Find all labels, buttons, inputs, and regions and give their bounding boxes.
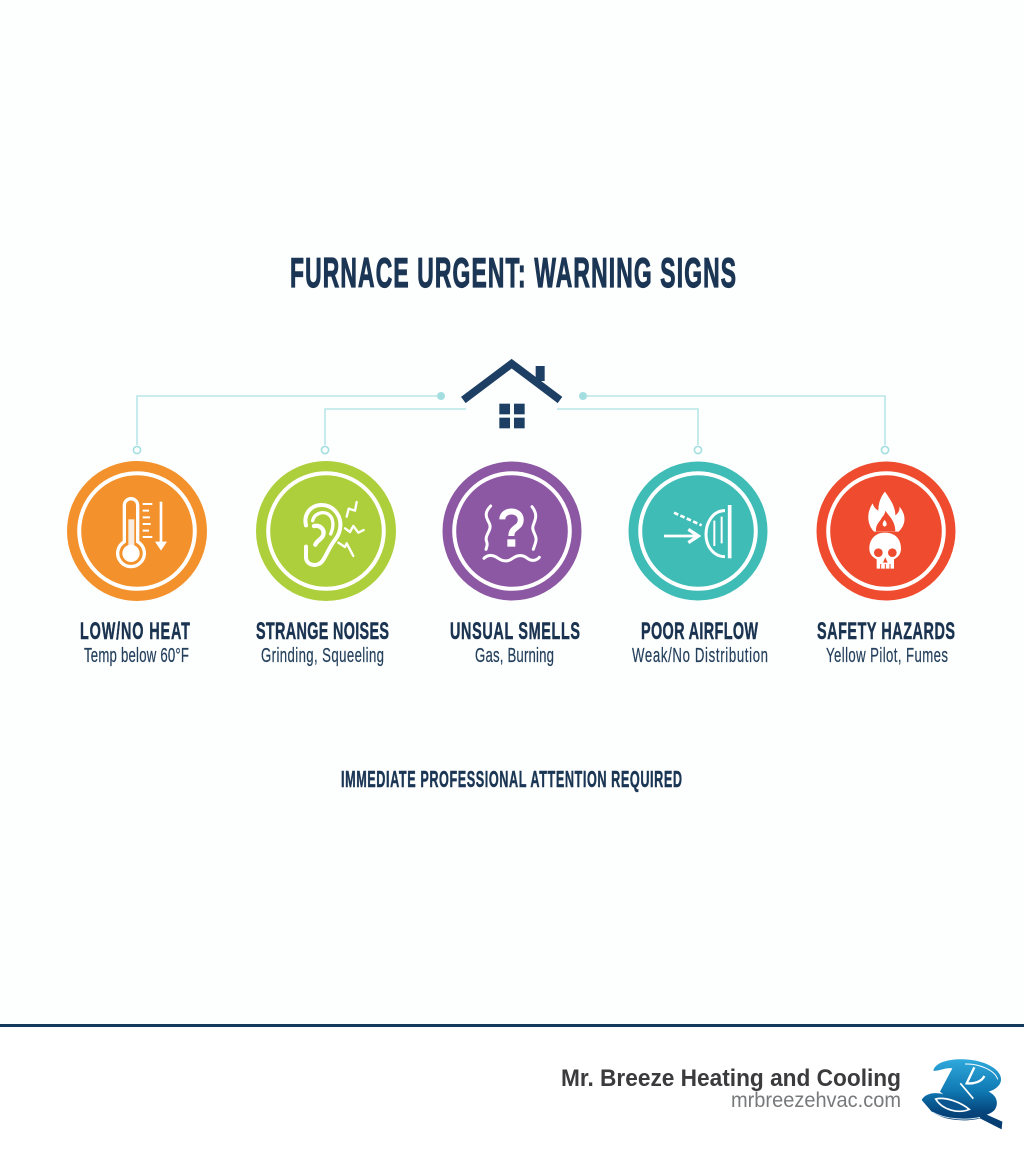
- panel: strange noises: [256, 461, 396, 667]
- callout: IMMEDIATE PROFESSIONAL ATTENTION REQUIRED: [341, 766, 682, 792]
- teal badge: [628, 462, 768, 600]
- sublabel: Yellow Pilot, Fumes: [826, 644, 948, 667]
- footer rule: [0, 1024, 1024, 1027]
- sublabel: Grinding, Squeeling: [261, 644, 384, 667]
- panel: unusual smells: [442, 462, 582, 667]
- icon: ear with noise marks: [305, 502, 364, 565]
- sublabel: Temp below 60°F: [84, 644, 189, 667]
- icon: flaming skull: [868, 492, 904, 569]
- panel: low/no heat: [67, 461, 207, 667]
- label: SAFETY HAZARDS: [817, 618, 955, 645]
- connector lines: [133, 392, 889, 454]
- label: STRANGE NOISES: [256, 618, 389, 645]
- green badge: [256, 461, 396, 601]
- purple badge: [442, 462, 582, 600]
- sublabel: Gas, Burning: [475, 644, 554, 667]
- icon: house: [463, 364, 560, 428]
- title: FURNACE URGENT: WARNING SIGNS: [290, 251, 736, 297]
- website: mrbreezehvac.com: [731, 1089, 901, 1112]
- panel: poor airflow: [628, 462, 768, 667]
- footer: [0, 1024, 1024, 1154]
- logo: [922, 1059, 1002, 1129]
- icon: question mark and odor waves: [484, 506, 539, 561]
- orange badge: [67, 461, 207, 601]
- company name: Mr. Breeze Heating and Cooling: [561, 1065, 901, 1092]
- icon: vent with arrow: [664, 505, 730, 558]
- sublabel: Weak/No Distribution: [632, 644, 768, 667]
- label: LOW/NO HEAT: [80, 618, 190, 645]
- red badge: [816, 462, 956, 600]
- label: POOR AIRFLOW: [641, 618, 758, 645]
- icon: thermometer with down arrow: [118, 499, 167, 567]
- panel: safety hazards: [816, 462, 956, 667]
- label: UNSUAL SMELLS: [450, 618, 580, 645]
